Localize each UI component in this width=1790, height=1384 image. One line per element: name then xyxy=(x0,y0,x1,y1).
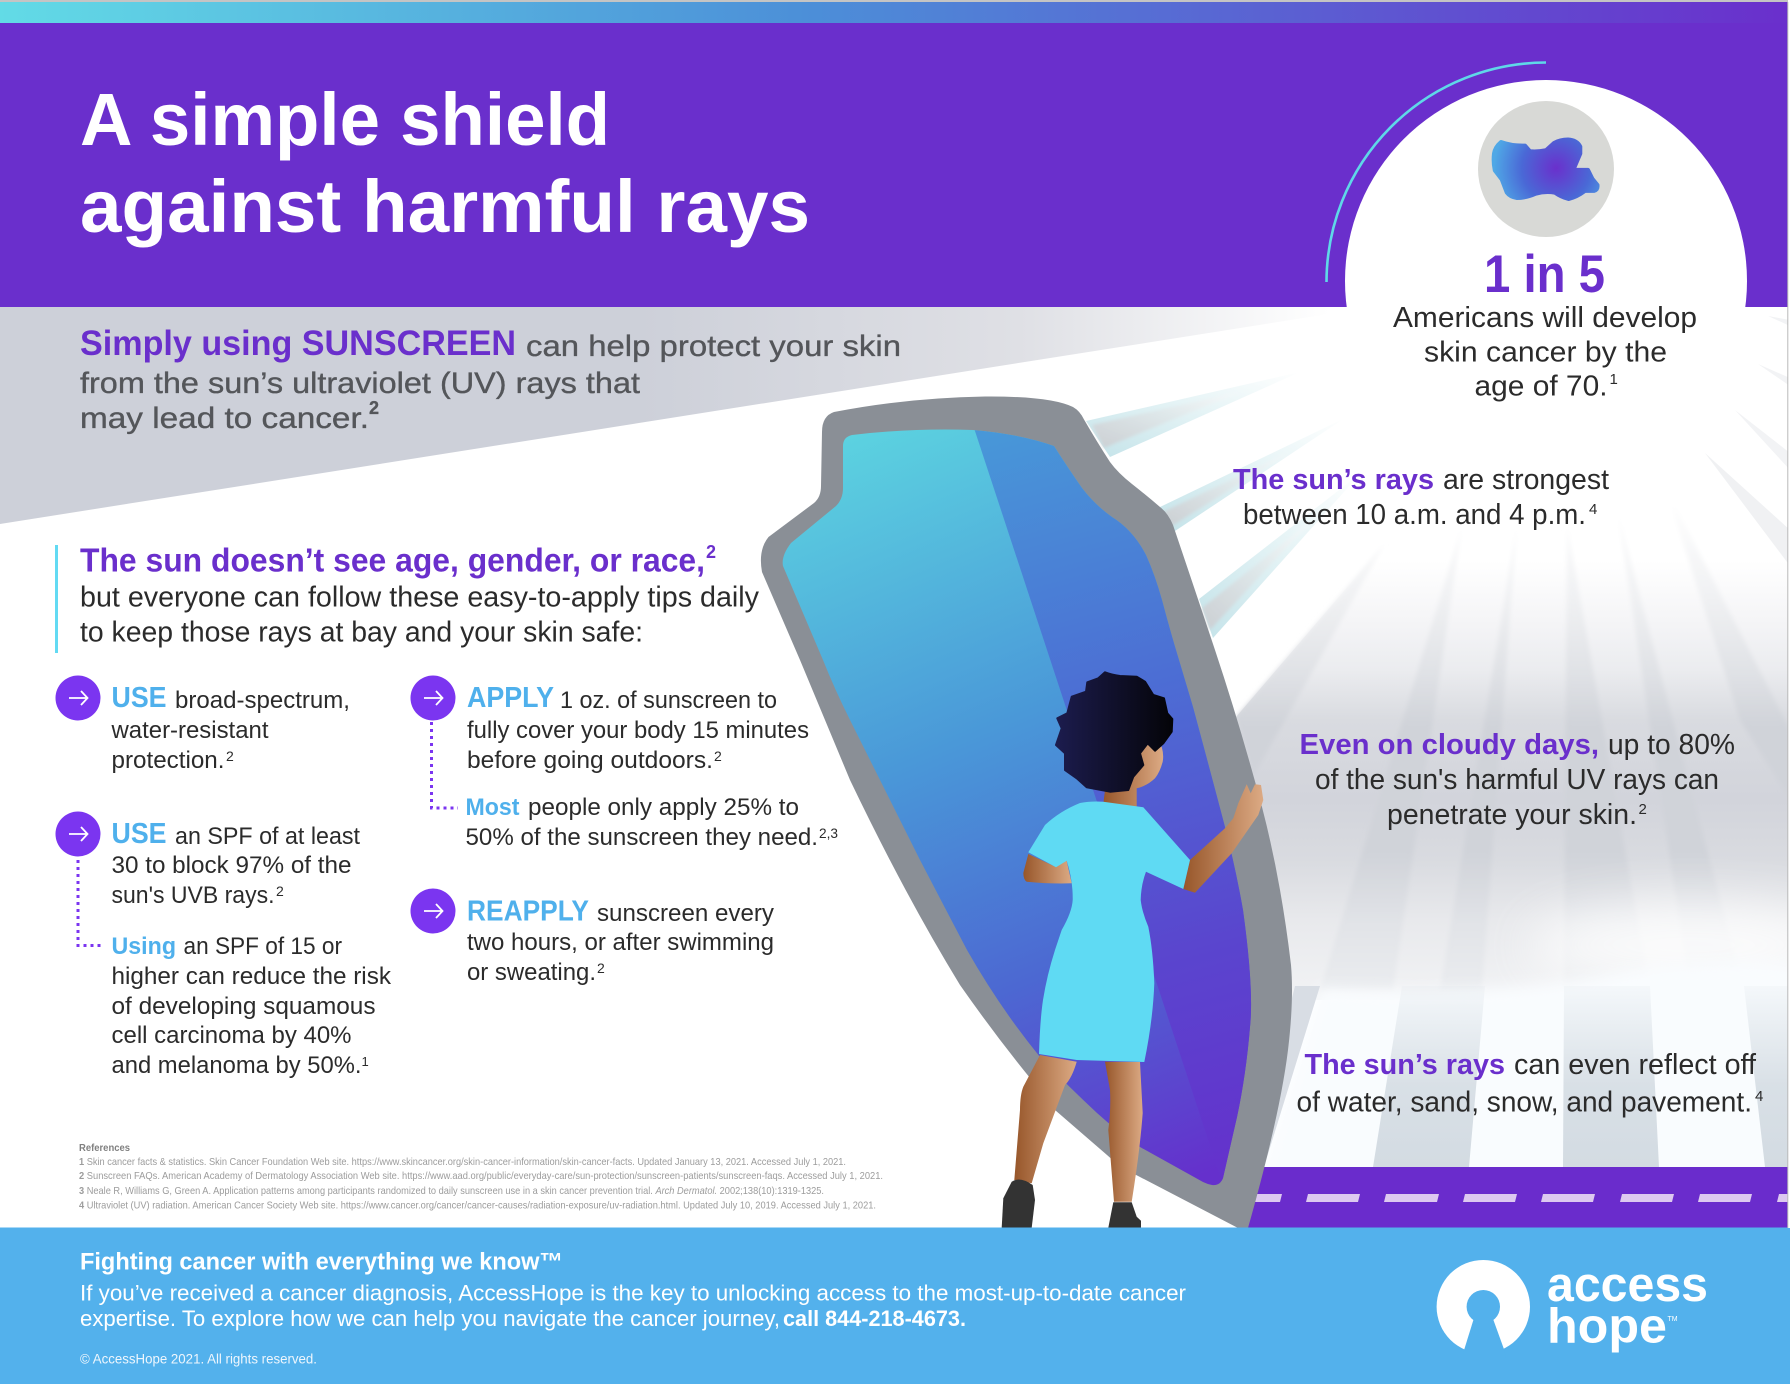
callout: reflected rays: 4 xyxy=(1755,1088,1763,1105)
tip: reapply: REAPPLY xyxy=(467,896,589,928)
logo: accesshope: TM xyxy=(1668,1316,1678,1323)
callout: strongest hours: are strongest xyxy=(1443,464,1609,496)
footer text: Fighting cancer with everything we know™ xyxy=(80,1248,563,1276)
sub-tip: SPF 15: 1 xyxy=(362,1054,369,1069)
icon: arrow xyxy=(56,812,100,856)
right shoe xyxy=(1108,1202,1141,1228)
sub-tip: SPF 15: Using xyxy=(112,933,176,960)
icon: skin lesion xyxy=(1478,101,1614,237)
lead text: Simply using SUNSCREEN xyxy=(80,324,516,363)
icon: arrow xyxy=(410,676,456,720)
references xyxy=(79,1142,883,1212)
tip: apply: before going outdoors. xyxy=(467,747,713,774)
references: 1 Skin cancer facts & statistics. Skin Cancer Foundation Web site. https://www.skincancer.org/skin-cancer-information/skin-cancer-facts. Updated January 13, 2021. Accessed July 1, 2021. xyxy=(79,1156,846,1168)
tip: reapply: sunscreen every xyxy=(597,900,774,927)
tip: use broad-spectrum: protection. xyxy=(112,747,224,774)
lead text: may lead to cancer. xyxy=(80,402,369,435)
sub-tip: SPF 15: an SPF of 15 or xyxy=(184,933,342,960)
sub-tip: SPF 15: higher can reduce the risk xyxy=(112,963,392,990)
sub-tip: SPF 15: of developing squamous xyxy=(112,993,376,1020)
callout: reflected rays: The sun’s rays xyxy=(1304,1049,1505,1081)
cyan arc xyxy=(1326,62,1546,282)
left leg xyxy=(1014,1055,1077,1183)
stat number: 1 in 5 xyxy=(1484,245,1605,304)
raised arm xyxy=(1183,784,1263,893)
references: 3 Neale R, Williams G, Green A. Application patterns among participants randomized to daily sunscreen use in a skin cancer prevention trial. Arch Dermatol. 2002;138(10):1319-1325. xyxy=(79,1185,824,1197)
callout: cloudy days: of the sun's harmful UV rays can xyxy=(1315,764,1719,796)
lead text xyxy=(80,324,901,435)
right leg xyxy=(1105,1062,1143,1202)
footer text: call 844-218-4673. xyxy=(783,1306,966,1331)
callout: strongest hours: 4 xyxy=(1589,501,1597,518)
sun ray fan background xyxy=(1236,316,1790,1190)
tip: apply: 2 xyxy=(714,748,722,764)
dotted connector xyxy=(432,722,458,808)
tip: use broad-spectrum: USE xyxy=(112,682,166,714)
callout: cloudy days: Even on cloudy days, xyxy=(1300,729,1599,761)
logo: accesshope: hope xyxy=(1547,1300,1667,1354)
tip: use SPF 30: sun's UVB rays. xyxy=(112,882,274,909)
shield inner light side xyxy=(782,430,1252,1186)
neck and face xyxy=(1103,745,1163,808)
intro heading and text xyxy=(80,542,760,648)
stat description: Americans will develop xyxy=(1393,302,1697,334)
intro heading and text: but everyone can follow these easy-to-apply tips daily xyxy=(80,582,760,614)
shield frame xyxy=(761,396,1292,1228)
tip: reapply: 2 xyxy=(597,960,605,976)
tip: apply: APPLY xyxy=(467,682,554,714)
hair xyxy=(1056,672,1172,792)
callout: strongest hours: The sun’s rays xyxy=(1233,464,1434,496)
footer band xyxy=(0,1228,1790,1384)
title xyxy=(80,78,810,248)
shield xyxy=(760,396,1300,1228)
tip: reapply: or sweating. xyxy=(467,959,596,986)
callout: reflected rays: can even reflect off xyxy=(1514,1049,1757,1081)
callout: reflected rays: of water, sand, snow, and pavement. xyxy=(1296,1086,1752,1118)
dress xyxy=(1028,802,1190,1062)
tip: reapply: two hours, or after swimming xyxy=(467,929,774,956)
panel: 1 in 5 stat xyxy=(1326,62,1747,482)
stat description: 1 xyxy=(1610,371,1618,388)
lead text: 2 xyxy=(369,398,379,418)
icon: arrow xyxy=(410,888,456,934)
title: A simple shield xyxy=(80,78,610,161)
sub-tip: SPF 15: cell carcinoma by 40% xyxy=(112,1022,352,1049)
callout: strongest hours: between 10 a.m. and 4 p.m. xyxy=(1243,499,1586,531)
tip: use broad-spectrum: 2 xyxy=(226,748,234,764)
icon: keyhole xyxy=(1437,1260,1530,1358)
callout: strongest hours xyxy=(1233,464,1609,531)
logo: accesshope xyxy=(1437,1258,1708,1358)
woman holding shield xyxy=(1002,672,1263,1228)
bent arm xyxy=(1023,854,1072,883)
sun rays striking the shield xyxy=(1086,372,1361,638)
tip: use SPF 30: USE xyxy=(112,818,166,850)
sub-tip: most people: Most xyxy=(466,794,520,821)
lead text: from the sun’s ultraviolet (UV) rays that xyxy=(80,367,641,400)
grey sun-ray wedge behind the lead text xyxy=(0,307,1373,524)
tip: use SPF 30: an SPF of at least xyxy=(175,823,360,850)
footer text: If you’ve received a cancer diagnosis, AccessHope is the key to unlocking access to the most-up-to-date cancer xyxy=(80,1280,1186,1306)
sub-tip: SPF 15 xyxy=(112,933,392,1079)
road xyxy=(1246,1167,1790,1228)
tip: use SPF 30: 2 xyxy=(276,883,284,899)
tip: use SPF 30 xyxy=(56,812,392,1079)
intro heading and text: to keep those rays at bay and your skin safe: xyxy=(80,616,643,648)
shield inner dark side xyxy=(974,430,1252,1181)
callout: cloudy days xyxy=(1300,729,1735,831)
stat description: skin cancer by the xyxy=(1424,336,1667,368)
references: 2 Sunscreen FAQs. American Academy of Dermatology Association Web site. https://www.aad.org/public/everyday-care/sun-protection/sunscreen-patients/sunscreen-faqs. Accessed July 1, 2021. xyxy=(79,1170,883,1182)
sub-tip: most people xyxy=(466,794,838,851)
callout: cloudy days: up to 80% xyxy=(1608,729,1735,761)
logo: accesshope: access xyxy=(1547,1258,1708,1312)
intro accent bar xyxy=(55,545,58,653)
intro heading and text: The sun doesn’t see age, gender, or race, xyxy=(80,542,705,578)
top gradient bar xyxy=(0,0,1790,23)
tip: apply: 1 oz. of sunscreen to xyxy=(560,687,777,714)
stat description xyxy=(1393,302,1697,402)
tip: use broad-spectrum xyxy=(56,676,350,774)
icon: arrow xyxy=(56,676,100,720)
tip: use SPF 30: 30 to block 97% of the xyxy=(112,852,352,879)
tip: use broad-spectrum: broad-spectrum, xyxy=(175,687,350,714)
callout: reflected rays xyxy=(1296,1049,1763,1118)
callout: cloudy days: 2 xyxy=(1638,801,1647,818)
header band xyxy=(0,23,1790,307)
tip: apply xyxy=(410,676,838,851)
footer text: expertise. To explore how we can help you navigate the cancer journey, xyxy=(80,1306,780,1331)
dotted connector xyxy=(78,860,104,946)
footer text xyxy=(80,1248,1186,1366)
stat description: age of 70. xyxy=(1474,370,1608,402)
title: against harmful rays xyxy=(80,165,810,248)
lead text: can help protect your skin xyxy=(526,330,901,363)
tip: apply: fully cover your body 15 minutes xyxy=(467,717,809,744)
intro heading and text: 2 xyxy=(706,542,716,562)
sub-tip: most people: 2,3 xyxy=(819,825,838,841)
white sun disc xyxy=(1345,80,1747,482)
sub-tip: SPF 15: and melanoma by 50%. xyxy=(112,1052,362,1079)
footer text: © AccessHope 2021. All rights reserved. xyxy=(80,1352,317,1366)
references: References xyxy=(79,1142,130,1154)
left shoe xyxy=(1002,1179,1035,1228)
callout: cloudy days: penetrate your skin. xyxy=(1387,799,1637,831)
sub-tip: most people: 50% of the sunscreen they need. xyxy=(466,824,818,851)
tip: reapply xyxy=(410,888,774,986)
tip: use broad-spectrum: water-resistant xyxy=(111,717,269,744)
sub-tip: most people: people only apply 25% to xyxy=(528,794,799,821)
references: 4 Ultraviolet (UV) radiation. American Cancer Society Web site. https://www.cancer.org/cancer/cancer-causes/radiation-exposure/uv-radiation.html. Updated July 10, 2019. Accessed July 1, 2021. xyxy=(79,1200,876,1212)
